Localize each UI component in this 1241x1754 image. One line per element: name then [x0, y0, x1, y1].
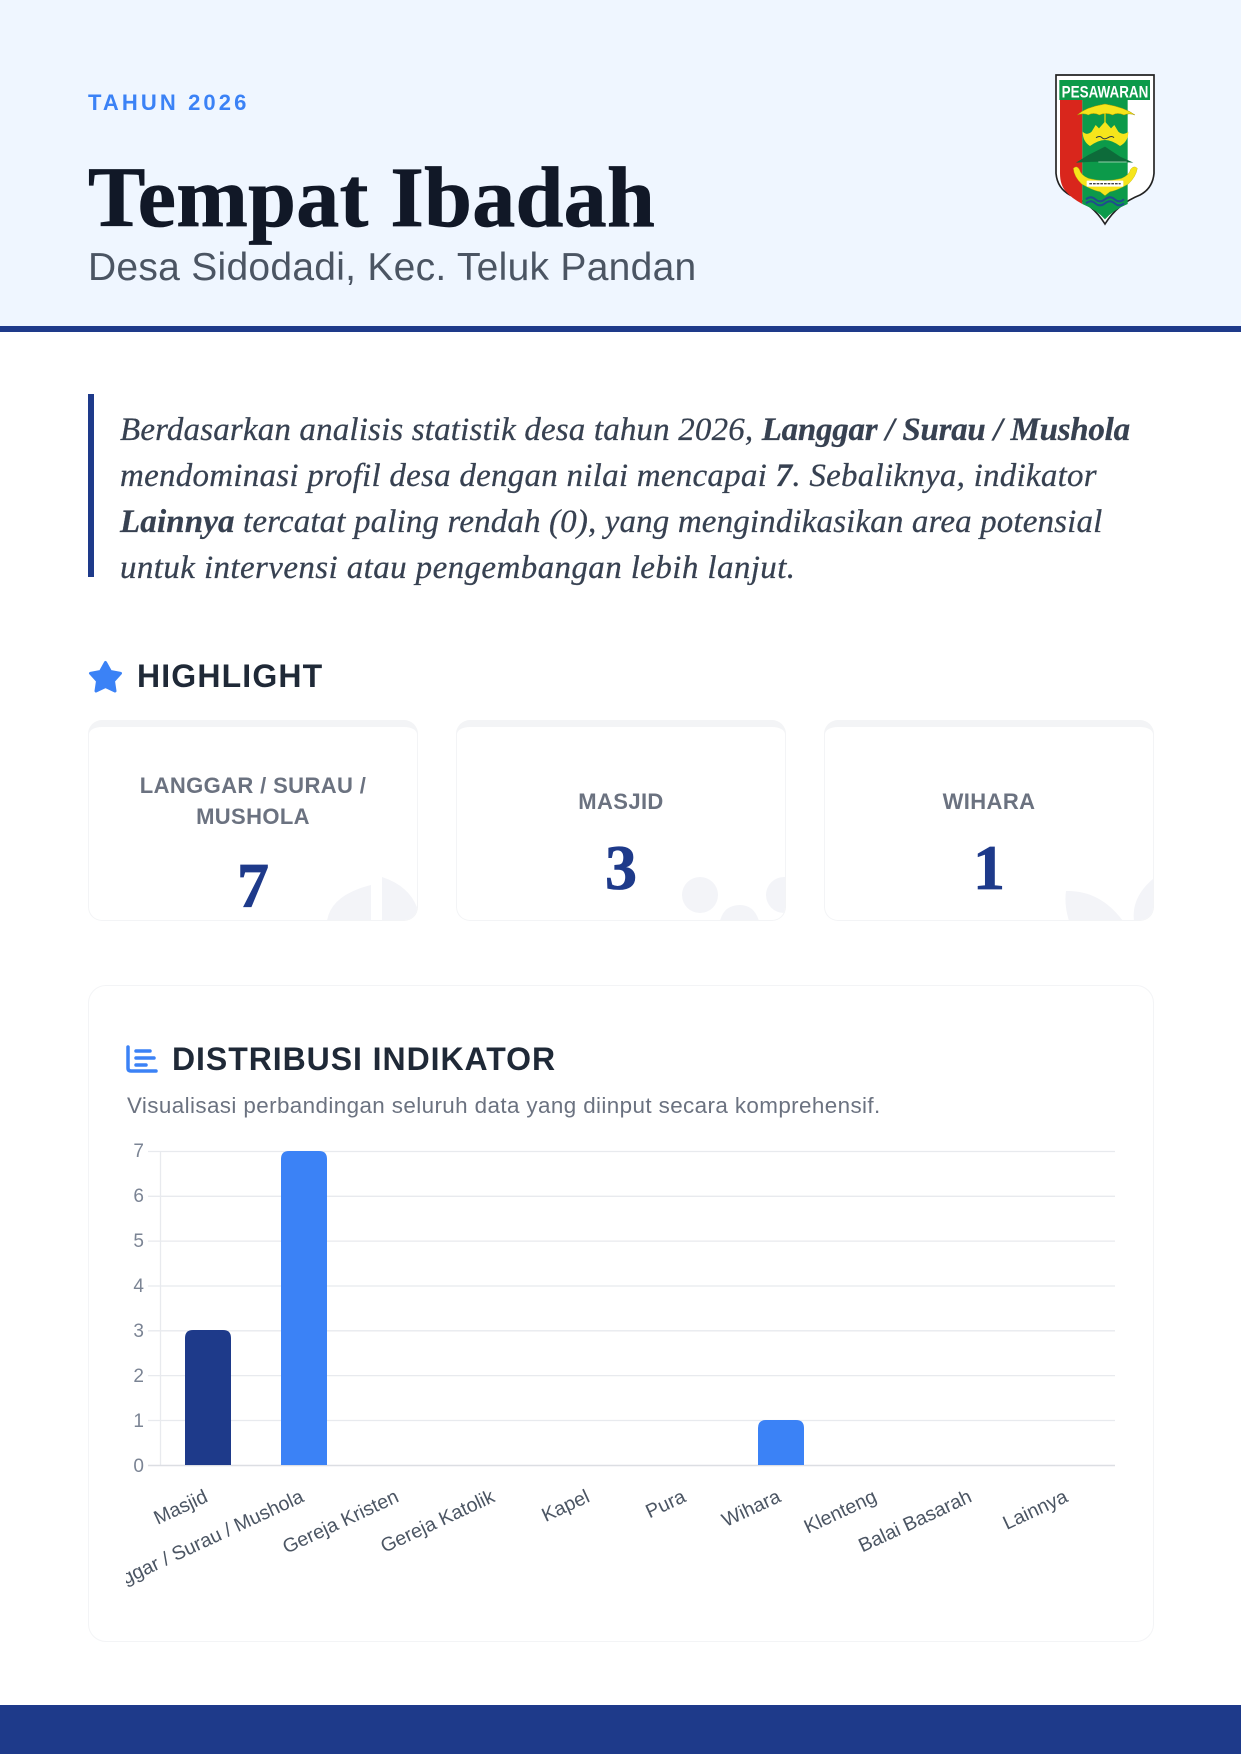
card: Masjid [456, 720, 786, 921]
callout text: Berdasarkan analisis statistik desa tahun 2026, Langgar / Surau / Mushola [120, 412, 1130, 448]
value: 3 [605, 832, 637, 903]
x axis labels: Balai Basarah [855, 1486, 975, 1557]
icon: chart [126, 1045, 158, 1073]
x axis labels: Gereja Katolik [377, 1486, 498, 1558]
y axis labels: 1 [133, 1411, 144, 1432]
x axis labels: Gereja Kristen [279, 1486, 402, 1558]
chart description: Visualisasi perbandingan seluruh data yang diinput secara komprehensif. [127, 1093, 881, 1118]
callout text: Lainnya tercatat paling rendah (0), yang mengindikasikan area potensial [120, 504, 1102, 540]
watermark icon [328, 877, 417, 920]
x axis labels: Kapel [538, 1486, 593, 1527]
y axis labels: 5 [133, 1231, 144, 1252]
watermark icon [1066, 879, 1153, 920]
label: MUSHOLA [196, 804, 310, 829]
y axis labels: 7 [133, 1141, 144, 1162]
label: WIHARA [943, 789, 1035, 814]
heading text: DISTRIBUSI INDIKATOR [172, 1041, 556, 1077]
x axis labels [89, 1486, 1071, 1603]
card: Langgar / Surau / Mushola [88, 720, 418, 921]
label: LANGGAR / SURAU / [140, 773, 366, 798]
heading text: HIGHLIGHT [137, 658, 323, 694]
x axis labels: Wihara [719, 1486, 784, 1532]
value: 7 [237, 850, 269, 921]
panel: distribution chart [88, 985, 1154, 1642]
highlight heading [88, 658, 323, 694]
chart heading [126, 1041, 556, 1077]
y axis labels: 3 [133, 1321, 144, 1342]
bars [185, 1151, 804, 1465]
x axis labels: Masjid [150, 1486, 211, 1529]
y axis labels: 6 [133, 1186, 144, 1207]
y axis labels [133, 1141, 144, 1477]
subtitle: Desa Sidodadi, Kec. Teluk Pandan [88, 246, 696, 289]
insight callout [88, 394, 1148, 577]
y axis labels: 0 [133, 1456, 144, 1477]
label: MASJID [578, 789, 664, 814]
header band [0, 0, 1241, 332]
x axis labels: Pura [642, 1486, 689, 1523]
bar chart [126, 1141, 1115, 1603]
callout text: mendominasi profil desa dengan nilai mencapai 7. Sebaliknya, indikator [120, 458, 1097, 494]
card: Wihara [824, 720, 1154, 921]
callout text [120, 412, 1130, 586]
callout text: untuk intervensi atau pengembangan lebih lanjut. [120, 550, 795, 586]
watermark icon [682, 877, 785, 920]
x axis labels: Lainnya [1000, 1486, 1071, 1535]
y axis labels: 4 [133, 1276, 144, 1297]
title: Tempat Ibadah [88, 149, 655, 245]
logo: Pesawaran shield: PESAWARAN [1062, 82, 1148, 101]
logo: Pesawaran shield [1055, 74, 1155, 226]
year label: TAHUN 2026 [88, 90, 249, 115]
y axis labels: 2 [133, 1366, 144, 1387]
icon: star [88, 660, 122, 692]
x axis labels: Klenteng [801, 1486, 880, 1538]
footer band [0, 1705, 1241, 1754]
value: 1 [973, 832, 1005, 903]
label [140, 773, 366, 829]
